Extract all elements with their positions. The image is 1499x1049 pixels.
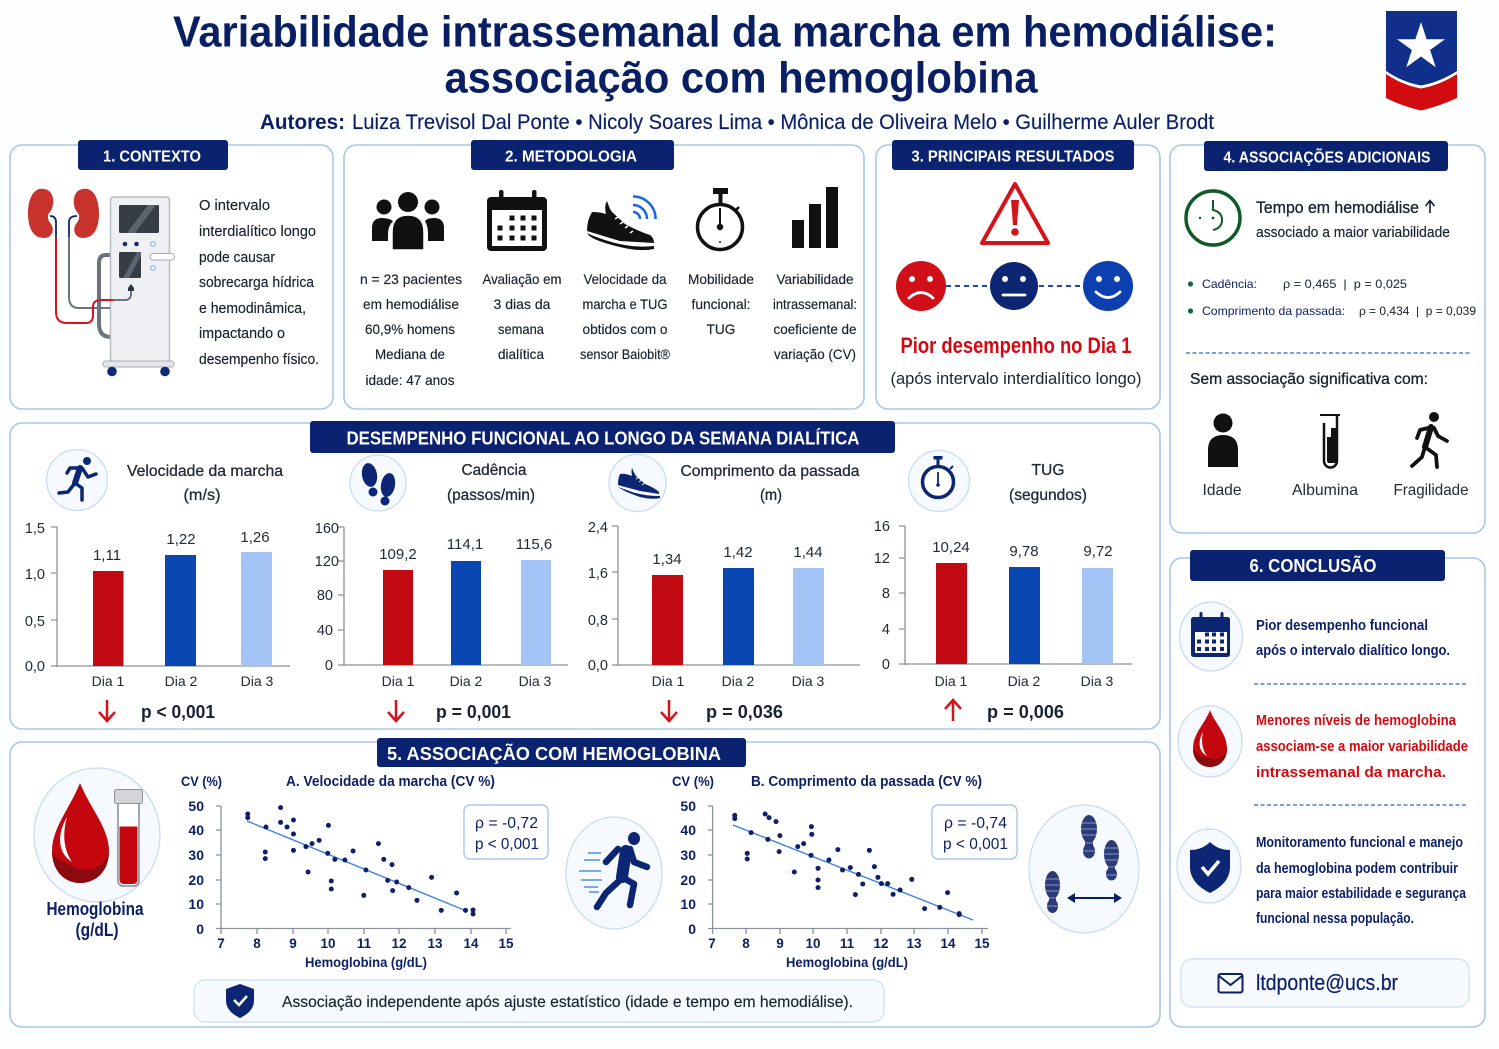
scatter plot A: 20 [188,872,204,888]
scatter plot B: 12 [873,936,889,951]
panel: conclusão [1170,550,1485,1027]
chart title [1009,462,1087,504]
heading: principais resultados: 3. PRINCIPAIS RESULTADOS [912,148,1115,166]
chart: velocidade da marcha: 1,11 [93,547,121,564]
text: method items: TUG [706,321,736,337]
text: method items: funcional: [692,296,750,312]
scatter plot B [672,774,1017,970]
panel: associação com hemoglobina [10,738,1160,1027]
chart title: (passos/min) [447,487,535,504]
heading: associações adicionais: 4. ASSOCIAÇÕES ADICIONAIS [1224,146,1431,166]
chart title: (segundos) [1009,487,1087,504]
icon: people [372,192,444,250]
callout: independent association: Associação independente após ajuste estatístico (idade e tempo em hemodiálise). [282,994,853,1011]
heading: principais resultados [892,140,1134,170]
chart: TUG: 12 [874,551,890,567]
scatter plot A: 14 [463,936,479,951]
chart: TUG: 16 [874,519,890,535]
scatter plot A: Hemoglobina (g/dL) [305,955,427,970]
chart: comprimento da passada: Dia 3 [792,673,825,689]
chart: velocidade da marcha: Dia 1 [92,673,125,689]
text: method items: obtidos com o [582,321,668,337]
chart title: Cadência [462,462,527,479]
icon: shield [1177,829,1241,903]
labels: sem associação [1202,482,1469,499]
arrow and p-value: p = 0,001 [436,702,511,722]
text: conclusion 2: associam-se a maior variabilidade [1256,739,1468,755]
scatter plot A: 30 [188,847,204,863]
contact email [1181,959,1469,1007]
scatter plot B: 20 [680,872,696,888]
scatter plot A: 11 [357,936,372,951]
chart: comprimento da passada: Dia 2 [722,673,755,689]
icon: performance faces [896,261,1133,311]
chart: cadência: 40 [317,623,333,639]
authors: Luiza Trevisol Dal Ponte • Nicoly Soares Lima • Mônica de Oliveira Melo • Guilherme Auler Brodt [352,111,1214,134]
icon: clock [1186,191,1240,245]
text: contexto: pode causar [199,249,275,266]
icon: footprints [350,455,406,511]
text: correlations: Comprimento da passada: [1202,304,1345,318]
text: contexto: impactando o [199,325,285,342]
heading: contexto: 1. CONTEXTO [103,148,201,166]
text: conclusion 3: da hemoglobina podem contribuir [1256,861,1458,877]
chart: comprimento da passada: 1,44 [793,544,823,561]
arrow and p-value: p < 0,001 [141,702,215,722]
scatter plot B: 10 [680,896,696,912]
scatter plot B: 10 [805,936,821,951]
text: method items: Velocidade da [584,271,667,287]
text: method items: Mobilidade [688,271,754,287]
labels: sem associação: Idade [1202,482,1242,499]
chart: cadência: Dia 3 [519,673,552,689]
icon: blood drop [1178,706,1242,777]
text: hemoglobina [46,899,144,940]
arrow and p-value [945,700,1064,722]
scatter plot A: 7 [217,936,225,951]
chart: TUG: 9,78 [1009,543,1039,560]
chart: TUG: 10,24 [932,539,970,556]
icon: warning triangle [982,184,1048,243]
heading: metodologia: 2. METODOLOGIA [505,148,637,166]
chart: cadência: Dia 2 [450,673,483,689]
icon: stopwatch [698,188,742,250]
text: conclusion 1 [1256,618,1450,659]
text: method items: n = 23 pacientes [360,271,462,287]
chart: velocidade da marcha: Dia 3 [241,673,274,689]
text: conclusion 1: Pior desempenho funcional [1256,618,1428,634]
scatter plot A: 40 [188,822,204,838]
text: method items: coeficiente de [774,321,857,337]
chart: TUG: 9,72 [1083,543,1113,560]
icon: footprints with arrow [1029,805,1139,933]
chart: comprimento da passada: 0,0 [588,658,608,674]
text: correlations [1188,277,1476,318]
heading: contexto [78,140,228,170]
text: contexto: O intervalo [199,197,270,214]
text: method items [360,271,857,388]
chart: comprimento da passada: 1,42 [723,544,753,561]
text: hemodialysis time: Tempo em hemodiálise [1256,198,1419,217]
icon: person, idade [1208,414,1238,467]
icon: shoe with sensor [587,196,656,250]
chart: velocidade da marcha: 1,0 [25,567,45,583]
chart: comprimento da passada: Dia 1 [652,673,685,689]
title: Variabilidade intrassemanal da marcha em hemodiálise: [173,8,1277,56]
text: method items: 3 dias da [494,296,551,312]
icon: bars [792,187,838,248]
chart title [447,462,535,504]
chart: TUG [874,450,1132,722]
scatter plot A: 9 [289,936,297,951]
scatter plot B: 9 [776,936,784,951]
scatter plot A: 8 [253,936,261,951]
scatter plot B: 50 [680,798,696,814]
text: method items: variação (CV) [774,346,856,362]
text: method items: em hemodiálise [363,296,459,312]
text: conclusion 3: funcional nessa população. [1256,911,1414,927]
chart title: TUG [1032,462,1064,479]
chart: comprimento da passada: 1,6 [588,566,608,582]
scatter plot A: 12 [391,936,407,951]
scatter plot B: 0 [688,921,696,937]
text: result statement [890,333,1142,388]
text: method items: intrassemanal: [773,296,857,312]
panel: desempenho funcional [10,421,1160,729]
icon: runner [46,450,108,510]
text: method items: idade: 47 anos [366,372,454,388]
scatter plot A: A. Velocidade da marcha (CV %) [286,774,495,790]
scatter plot B: 40 [680,822,696,838]
chart: cadência: 0 [325,658,333,674]
panel: contexto [10,140,333,409]
text: contexto [199,197,319,368]
text: hemodialysis time: associado a maior variabilidade [1256,225,1450,241]
scatter plot A: 50 [188,798,204,814]
chart: velocidade da marcha: 1,22 [166,531,196,548]
chart: cadência: 160 [315,521,339,537]
text: contexto: e hemodinâmica, [199,300,306,317]
scatter plot A: 13 [427,936,443,951]
scatter plot B: Hemoglobina (g/dL) [786,955,908,970]
scatter plot B: B. Comprimento da passada (CV %) [751,774,982,790]
text: sem associação: Sem associação significativa com: [1190,371,1428,388]
scatter plot B: 13 [906,936,922,951]
text: conclusion 3: Monitoramento funcional e manejo [1256,835,1463,851]
text: method items: semana [498,321,544,337]
icon: running person [566,817,662,929]
chart: TUG: Dia 3 [1081,673,1114,689]
contact email: ltdponte@ucs.br [1256,970,1398,995]
chart: TUG: 8 [882,586,890,602]
scatter plot A: 0 [196,921,204,937]
scatter plot A: 15 [498,936,514,951]
chart: cadência: Dia 1 [382,673,415,689]
chart: cadência: 114,1 [447,536,483,553]
text: method items: 60,9% homens [365,321,455,337]
scatter plot B: 7 [708,936,716,951]
text: result statement: Pior desempenho no Dia 1 [900,333,1132,358]
heading: associação com hemoglobina [377,738,746,767]
chart: comprimento da passada: 2,4 [588,520,608,536]
chart: comprimento da passada: 1,34 [652,551,682,568]
scatter plot A: ρ = -0,72 [475,815,538,832]
text: conclusion 1: após o intervalo dialítico longo. [1256,643,1450,659]
text: conclusion 2: intrassemanal da marcha. [1256,765,1446,781]
chart: TUG: 4 [882,622,890,638]
text: hemoglobina: (g/dL) [76,920,118,940]
heading: desempenho funcional [310,421,895,453]
text: hemodialysis time [1256,198,1450,241]
title [173,8,1277,102]
text: correlations: Cadência: [1202,277,1257,291]
chart: TUG: 0 [882,657,890,673]
text: contexto: desempenho físico. [199,351,319,368]
arrow and p-value [99,700,215,722]
icon: frailty walker [1412,412,1447,467]
icon: shoe [609,454,666,512]
chart: velocidade da marcha: Dia 2 [165,673,198,689]
icon: calendar [1180,602,1242,671]
chart: cadência: 115,6 [516,536,552,553]
arrow and p-value [388,700,511,722]
text: contexto: interdialítico longo [199,223,316,240]
text: method items: Mediana de [375,346,445,362]
text: correlations: ρ = 0,434 | p = 0,039 [1359,304,1476,318]
arrow and p-value: p = 0,036 [706,702,783,722]
chart: cadência [315,455,568,722]
chart: velocidade da marcha: 1,26 [240,529,270,546]
chart: TUG: Dia 2 [1008,673,1041,689]
heading: desempenho funcional: DESEMPENHO FUNCIONAL AO LONGO DA SEMANA DIALÍTICA [346,428,860,448]
chart: comprimento da passada: 0,8 [588,613,608,629]
labels: sem associação: Fragilidade [1394,482,1469,499]
chart: cadência: 120 [315,554,339,570]
heading: metodologia [471,140,674,170]
logo shield [1386,11,1457,110]
icon: albumin tube [1320,415,1340,468]
text: conclusion 3 [1256,835,1467,927]
text: correlations: ρ = 0,465 | p = 0,025 [1283,277,1407,291]
chart: velocidade da marcha [25,450,290,722]
text: method items: Avaliação em [482,271,562,287]
scatter plot B: 30 [680,847,696,863]
text: conclusion 2: Menores níveis de hemoglobina [1256,713,1457,729]
panel: metodologia [344,140,864,409]
scatter plot A: CV (%) [181,774,222,789]
title: associação com hemoglobina [444,54,1038,102]
chart title [127,463,283,504]
text: method items: sensor Baiobit® [580,346,671,362]
icon: blood drop and tube [34,768,160,902]
text: contexto: sobrecarga hídrica [199,274,315,291]
chart: cadência: 109,2 [379,546,417,563]
text: conclusion 2 [1256,713,1468,781]
scatter plot B: 8 [742,936,750,951]
text: method items: Variabilidade [776,271,854,287]
chart: velocidade da marcha: 0,5 [25,614,45,630]
scatter plot B: 15 [974,936,990,951]
callout: independent association [194,980,884,1022]
heading: associação com hemoglobina: 5. ASSOCIAÇÃO COM HEMOGLOBINA [387,743,721,764]
scatter plot B: CV (%) [672,774,714,789]
arrow and p-value: p = 0,006 [987,702,1064,722]
panel: associações adicionais [1170,141,1485,533]
chart: comprimento da passada [588,454,860,722]
chart: TUG: Dia 1 [935,673,968,689]
scatter plot B: 14 [940,936,956,951]
labels: sem associação: Albumina [1292,482,1358,499]
icon: stopwatch [908,450,970,512]
chart: cadência: 80 [317,588,333,604]
chart: velocidade da marcha: 1,5 [25,521,45,537]
heading: associações adicionais [1204,141,1448,171]
panel: principais resultados [876,140,1160,409]
scatter plot B: p < 0,001 [943,836,1008,853]
arrow and p-value [661,700,783,722]
scatter plot A [181,774,548,970]
icon: kidneys and dialysis machine [28,189,174,376]
scatter plot A: 10 [188,896,204,912]
authors: Autores: [260,111,345,134]
chart title: Velocidade da marcha [127,463,283,480]
icon: calendar [487,190,547,251]
scatter plot B: ρ = -0,74 [944,815,1007,832]
chart: velocidade da marcha: 0,0 [25,659,45,675]
scatter plot B: 11 [840,936,855,951]
text: method items: dialítica [498,346,544,362]
chart title [680,463,860,504]
chart title: (m/s) [184,487,220,504]
heading: conclusão: 6. CONCLUSÃO [1250,555,1376,576]
chart title: (m) [760,487,782,504]
text: method items: marcha e TUG [582,296,668,312]
heading: conclusão [1190,550,1445,581]
scatter plot A: p < 0,001 [475,836,539,853]
chart title: Comprimento da passada [680,463,860,480]
text: hemoglobina: Hemoglobina [46,899,144,919]
text: result statement: (após intervalo interdialítico longo) [890,369,1142,388]
scatter plot A: 10 [320,936,336,951]
